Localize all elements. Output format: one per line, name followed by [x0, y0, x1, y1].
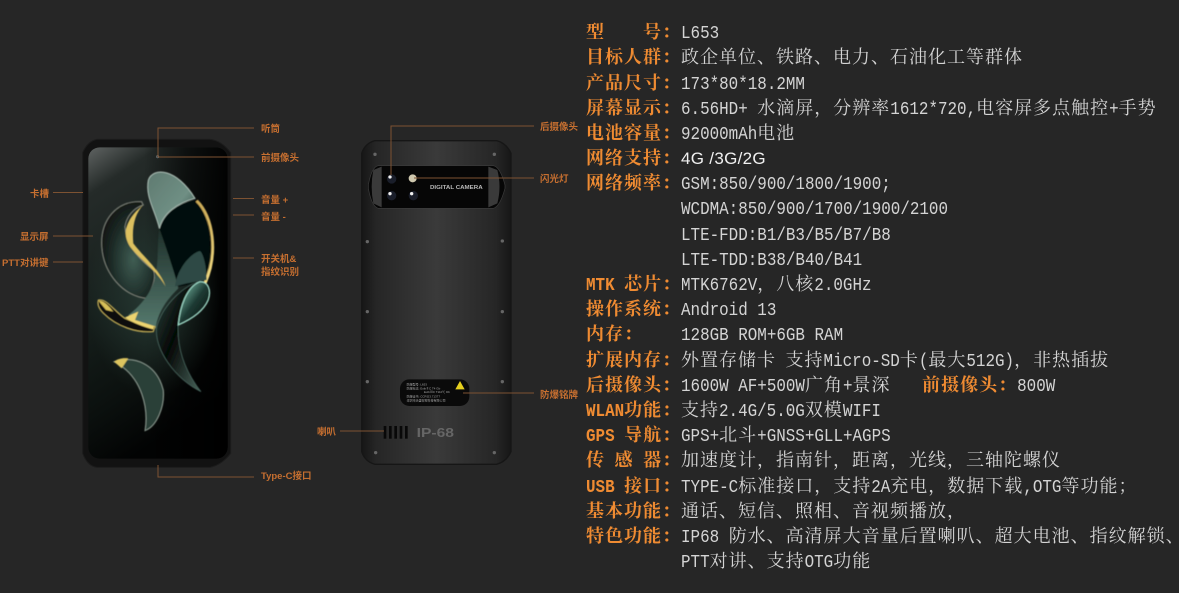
front phone body — [83, 139, 231, 467]
callouts back — [340, 126, 534, 431]
nameplate: 防爆型号: L653 — [407, 382, 427, 387]
label: type-c: Type-C接口 — [261, 470, 312, 482]
spec row: screen: 1612*720, — [890, 99, 976, 120]
spec row: cameras: 广角 景深 前摄像头： — [805, 371, 1017, 397]
camera module — [368, 166, 505, 208]
infographic page: 操作系统： — [586, 295, 681, 321]
back phone — [362, 141, 511, 464]
spec row: model — [586, 18, 719, 44]
infographic page: GPS — [586, 426, 615, 447]
spec row: features continued: OTG — [805, 552, 833, 573]
spec row: usb: 2A — [871, 477, 890, 498]
label: power and fingerprint: 指纹识别 — [261, 266, 299, 278]
spec row: wlan: 支持 双模 — [681, 396, 843, 422]
spec row: model: L653 — [681, 23, 719, 44]
label: flash: 闪光灯 — [540, 173, 569, 185]
spec row: bands wcdma: WCDMA:850/900/1700/1900/2100 — [681, 199, 948, 220]
spec row: size — [586, 69, 805, 95]
screen with wallpaper — [87, 147, 228, 459]
front phone — [83, 139, 231, 467]
spec row: os — [586, 295, 776, 321]
infographic page: 基本功能： — [586, 497, 681, 523]
spec row: battery — [586, 119, 795, 145]
nameplate: 防爆标志: ExibⅡC T4 Gb — [407, 385, 441, 390]
spec row: network — [586, 144, 766, 170]
label: speaker: 喇叭 — [317, 426, 337, 438]
spec row: features continued: PTT — [681, 552, 710, 573]
spec row: screen: + — [1109, 99, 1119, 120]
spec row: cameras — [586, 371, 1056, 397]
spec row: wlan: 2.4G/5.0G — [719, 401, 805, 422]
spec row: screen: 水滴屏，分辨率 电容屏多点触控 手势 — [757, 94, 1157, 120]
spec row: memory — [586, 320, 843, 346]
infographic page: 扩展内存： — [586, 346, 681, 372]
lens lower right — [409, 191, 418, 200]
spec row: gps: +GNSS+GLL+AGPS — [757, 426, 891, 447]
spec row: features: 防水、高清屏大音量后置喇叭、超大电池、指纹解锁、 — [729, 522, 1179, 548]
infographic page: WLAN — [586, 401, 624, 422]
spec row: memory: 128GB ROM+6GB RAM — [681, 325, 843, 346]
spec row: features: IP68 — [681, 527, 719, 548]
label: sim slot: 卡槽 — [30, 188, 50, 200]
infographic page: 特色功能： — [586, 522, 681, 548]
spec row: features continued: 对讲、支持 功能 — [710, 547, 871, 573]
spec row: target: 政企单位、铁路、电力、石油化工等群体 — [681, 43, 1023, 69]
label: power and fingerprint: 开关机& — [261, 254, 296, 265]
spec row: expansion: 外置存储卡 支持 卡 最大 ，非热插拔 — [681, 346, 1109, 372]
infographic page: USB — [586, 477, 615, 498]
callout labels — [2, 121, 579, 482]
spec row: bands gsm — [586, 169, 891, 195]
nameplate — [400, 379, 469, 406]
screws — [366, 153, 504, 454]
infographic page: 屏幕显示： — [586, 94, 681, 120]
spec row: cameras: + — [843, 376, 853, 397]
callouts front — [53, 128, 254, 477]
spec row: screen: 6.56HD+ — [681, 99, 748, 120]
spec row: battery: 电池 — [757, 119, 795, 145]
infographic page: 导航： — [624, 421, 681, 447]
infographic page: 内存： — [586, 320, 643, 346]
infographic page: 传 感 器： — [586, 446, 681, 472]
label: front camera: 前摄像头 — [261, 152, 300, 164]
infographic page: 芯片： — [624, 270, 681, 296]
spec row: network: 4G /3G/2G — [681, 149, 766, 168]
spec row: usb: ,OTG — [1023, 477, 1061, 498]
infographic page: 网络支持： — [586, 144, 681, 170]
lens top — [387, 174, 396, 184]
spec row: battery: 92000mAh — [681, 124, 757, 145]
spec row: basic: 通话、短信、照相、音视频播放， — [681, 497, 966, 523]
label: ex nameplate: 防爆铭牌 — [540, 389, 579, 401]
front camera dot — [156, 155, 159, 158]
spec row: chip: 2.0GHz — [814, 275, 872, 296]
flash — [409, 174, 417, 182]
back phone body — [362, 141, 511, 464]
spec row: size: 173*80*18.2MM — [681, 74, 805, 95]
label: earpiece: 听筒 — [261, 123, 281, 135]
IP-68 mark: IP-68 — [417, 426, 454, 440]
spec row: sensors: 加速度计，指南针，距离，光线，三轴陀螺仪 — [681, 446, 1061, 472]
infographic page: 型 号： — [586, 18, 681, 44]
spec row: wlan: WIFI — [843, 401, 881, 422]
label: volume up: 音量 + — [261, 194, 289, 206]
spec row: chip: MTK6762V — [681, 275, 757, 296]
label: display: 显示屏 — [20, 232, 49, 243]
nameplate: 深圳市天盛智控科技有限公司 — [407, 397, 445, 402]
spec row: gps: GPS+ — [681, 426, 719, 447]
infographic page: 功能： — [624, 396, 681, 422]
spec row: expansion: Micro-SD — [824, 351, 900, 372]
infographic page: 目标人群： — [586, 43, 681, 69]
label: volume down: 音量 - — [261, 211, 286, 223]
spec row: usb: TYPE-C — [681, 477, 738, 498]
infographic page: 接口： — [624, 472, 681, 498]
spec row: expansion: ( — [919, 351, 928, 372]
spec row: cameras: 800W — [1017, 376, 1055, 397]
spec row: os: Android 13 — [681, 300, 776, 321]
label: rear camera: 后摄像头 — [540, 121, 579, 133]
spec row: bands fdd: LTE-FDD:B1/B3/B5/B7/B8 — [681, 225, 891, 246]
spec row: expansion: 512G) — [966, 351, 1014, 372]
spec row: bands tdd: LTE-TDD:B38/B40/B41 — [681, 250, 862, 271]
label: ptt key: PTT对讲键 — [2, 257, 49, 269]
spec row: bands gsm: GSM:850/900/1800/1900; — [681, 174, 891, 195]
spec row: gps — [586, 421, 891, 447]
camera text: DIGITAL CAMERA — [430, 185, 483, 191]
speaker grille — [384, 426, 408, 439]
infographic page: 产品尺寸： — [586, 69, 681, 95]
infographic page: MTK — [586, 275, 615, 296]
lens lower left — [387, 191, 396, 200]
nameplate: ExibⅢC T110℃ Db — [424, 390, 450, 394]
infographic page: 电池容量： — [586, 119, 681, 145]
spec row: wlan — [586, 396, 881, 422]
spec row: usb: 标准接口，支持 充电，数据下载 等功能； — [738, 472, 1137, 498]
spec row: gps: 北斗 — [719, 421, 757, 447]
infographic page: 网络频率： — [586, 169, 681, 195]
infographic page: 后摄像头： — [586, 371, 681, 397]
spec row: chip: ，八核 — [757, 270, 814, 296]
spec row: screen — [586, 94, 1157, 120]
spec row: cameras: 1600W AF+500W — [681, 376, 805, 397]
phone diagrams — [2, 121, 579, 482]
spec row: chip — [586, 270, 872, 296]
nameplate: 防爆证书: CCRI23.71377 — [407, 393, 440, 398]
